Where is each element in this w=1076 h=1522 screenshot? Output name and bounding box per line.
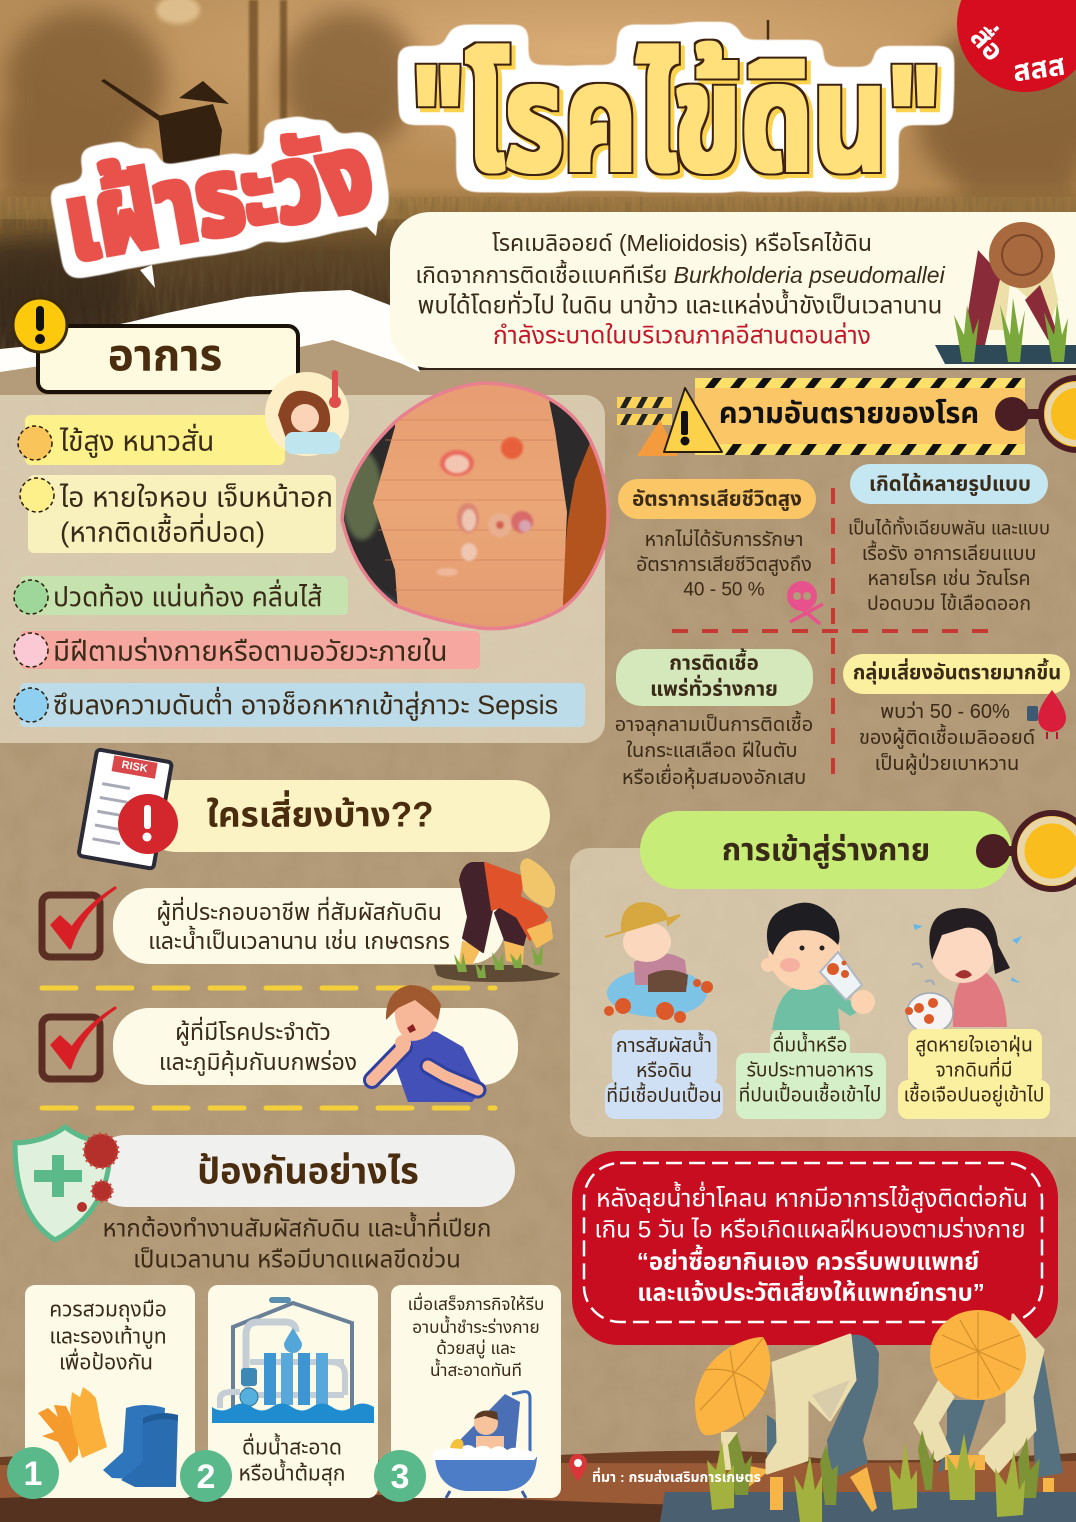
- symptom: cough: ไอ หายใจหอบ เจ็บหน้าอก: [59, 482, 333, 512]
- panel: intro: พบได้โดยทั่วไป ในดิน นาข้าว และแหล่งน้ำขังเป็นเวลานาน: [418, 288, 942, 320]
- icon: risk clipboard: [78, 749, 178, 869]
- block: many forms: เป็นได้ทั้งเฉียบพลัน และแบบ: [848, 516, 1050, 540]
- icon: boy drinking: [761, 903, 875, 1030]
- icon: boots: [103, 1405, 178, 1487]
- icon: blood drop: [1027, 690, 1066, 739]
- text: prevention intro: เป็นเวลานาน หรือมีบาดแผลขีดข่วน: [133, 1246, 461, 1274]
- card: clean water: ดื่มน้ำสะอาด: [242, 1432, 342, 1460]
- label: inhalation: เชื้อเจือปนอยู่เข้าไป: [904, 1082, 1044, 1108]
- badge: step 3: 3: [391, 1458, 409, 1496]
- label: contact: การสัมผัสน้ำ: [616, 1032, 712, 1057]
- sticker tails: [140, 222, 378, 288]
- label: contact: ที่มีเชื้อปนเปื้อน: [606, 1082, 722, 1107]
- text: prevention intro: [103, 1212, 491, 1274]
- icon: man in bathtub: [432, 1392, 537, 1498]
- block: many forms: ปอดบวม ไข้เลือดออก: [867, 592, 1031, 615]
- card: bathing: น้ำสะอาดทันที: [430, 1358, 522, 1380]
- block: many forms: เรื้อรัง อาการเลียนแบบ: [862, 540, 1036, 565]
- heading: ใครเสี่ยงบ้าง: ใครเสี่ยงบ้าง??: [206, 789, 434, 834]
- card: gloves and boots: เพื่อป้องกัน: [59, 1348, 153, 1374]
- heading: ป้องกันอย่างไร: ป้องกันอย่างไร: [197, 1150, 419, 1192]
- card: bathing: เมื่อเสร็จภารกิจให้รีบ: [408, 1292, 544, 1314]
- icon: checkbox 2: [42, 1008, 115, 1079]
- icon: gloves: [38, 1387, 107, 1463]
- illustration: farmers planting rice: [695, 1310, 1063, 1522]
- heading: ป้องกันอย่างไร: [90, 1135, 515, 1207]
- badge: step 2: 2: [197, 1458, 215, 1496]
- icon: warning triangle with barrier and cone: [617, 388, 722, 456]
- label: inhalation: สูดหายใจเอาฝุ่น: [915, 1034, 1033, 1058]
- panel: symptoms: [0, 395, 605, 743]
- card: bathing: ด้วยสบู่ และ: [436, 1338, 516, 1360]
- callout: warning advice: และแจ้งประวัติเสี่ยงให้แพทย์ทราบ”: [637, 1275, 985, 1306]
- callout: warning advice: [572, 1151, 1058, 1345]
- divider: red dashed cross: [672, 488, 1002, 785]
- heading: ใครเสี่ยงบ้าง: [140, 780, 550, 852]
- symptom: abdominal pain: ปวดท้อง แน่นท้อง คลื่นไส้: [53, 579, 322, 612]
- label: inhalation: [898, 1029, 1050, 1119]
- card: clean water: หรือน้ำต้มสุก: [239, 1458, 345, 1486]
- heading: ความอันตรายของโรค: [695, 378, 1025, 455]
- symptom: fever: [18, 415, 285, 465]
- symptom: abscess: [14, 631, 480, 669]
- risk item: chronic disease: และภูมิคุ้มกันบกพร่อง: [159, 1049, 357, 1077]
- card: clean water: [208, 1285, 378, 1498]
- header photo: farmer in misty rice field: [0, 0, 1076, 370]
- panel: intro: โรคเมลิออยด์ (Melioidosis) หรือโรคไข้ดิน: [492, 230, 872, 256]
- icon: warning circle: [13, 298, 67, 352]
- badge: step 1: [7, 1447, 59, 1499]
- source: [569, 1454, 761, 1485]
- symptom: cough: (หากติดเชื้อที่ปอด): [60, 512, 265, 548]
- panel: intro: เกิดจากการติดเชื้อแบคทีเรีย Burkholderia pseudomallei: [415, 259, 946, 288]
- heading: ความอันตรายของโรค: ความอันตรายของโรค: [719, 398, 979, 430]
- card: bathing: [391, 1285, 561, 1498]
- block: high mortality: หากไม่ได้รับการรักษา: [645, 528, 803, 551]
- label: contact: [605, 1030, 723, 1119]
- symptom: cough: [20, 475, 336, 553]
- symptom: fever: ไข้สูง หนาวสั่น: [59, 423, 214, 458]
- card: gloves and boots: ควรสวมถุงมือ: [49, 1298, 167, 1322]
- risk item: farmers: ผู้ที่ประกอบอาชีพ ที่สัมผัสกับดิน: [156, 896, 442, 927]
- symptom: abscess: มีฝีตามร่างกายหรือตามอวัยวะภายใน: [53, 636, 447, 666]
- divider: yellow dashes 1: [42, 986, 495, 990]
- heading: อาการ: [38, 326, 298, 392]
- badge: step 3: [374, 1450, 426, 1502]
- block: systemic infection: หรือเยื่อหุ้มสมองอักเสบ: [622, 763, 806, 789]
- source: ที่มา : กรมส่งเสริมการเกษตร: [592, 1467, 761, 1485]
- block: risk group: เป็นผู้ป่วยเบาหวาน: [875, 752, 1019, 776]
- divider: yellow dashes 2: [42, 1106, 495, 1110]
- block: systemic infection: [615, 648, 813, 789]
- card: bathing: อาบน้ำชำระร่างกาย: [412, 1315, 540, 1337]
- risk item: farmers: [113, 888, 505, 964]
- block: high mortality: [618, 479, 816, 600]
- risk item: chronic disease: [113, 1008, 518, 1085]
- photo: skin lesions: [340, 380, 620, 640]
- callout: warning advice: หลังลุยน้ำย่ำโคลน หากมีอาการไข้สูงติดต่อกัน: [596, 1182, 1028, 1214]
- symptom: abdominal pain: [14, 576, 348, 615]
- label: ingestion: รับประทานอาหาร: [747, 1060, 873, 1082]
- block: risk group: [843, 654, 1070, 776]
- block: systemic infection: แพร่ทั่วร่างกาย: [650, 674, 778, 700]
- block: many forms: เกิดได้หลายรูปแบบ: [869, 472, 1031, 496]
- label: inhalation: จากดินที่มี: [936, 1056, 1012, 1082]
- icon: woman coughing: [905, 908, 1022, 1033]
- heading: การเข้าสู่ร่างกาย: การเข้าสู่ร่างกาย: [722, 832, 930, 868]
- card: gloves and boots: [25, 1285, 195, 1498]
- icon: water filtration system: [212, 1297, 374, 1423]
- block: risk group: ของผู้ติดเชื้อเมลิออยด์: [859, 723, 1035, 750]
- block: high mortality: อัตราการเสียชีวิตสูง: [632, 488, 802, 512]
- label: ingestion: ที่ปนเปื้อนเชื้อเข้าไป: [739, 1082, 881, 1106]
- risk item: chronic disease: ผู้ที่มีโรคประจำตัว: [175, 1016, 331, 1047]
- text: prevention intro: หากต้องทำงานสัมผัสกับดิน และน้ำที่เปียก: [103, 1212, 491, 1242]
- callout: warning advice: เกิน 5 วัน ไอ หรือเกิดแผลฝีหนองตามร่างกาย: [594, 1216, 1026, 1244]
- badge: สื่อ สสส: สื่อ: [964, 18, 1013, 67]
- icon: farmer planting rice (intro): [935, 222, 1076, 364]
- panel: routes of entry: [570, 848, 1076, 1137]
- badge: step 2: [180, 1450, 232, 1502]
- heading: การเข้าสู่ร่างกาย: [640, 811, 1012, 889]
- block: many forms: หลายโรค เช่น วัณโรค: [867, 567, 1031, 590]
- connector: danger header circle: [995, 378, 1076, 450]
- panel: intro: [390, 212, 1076, 368]
- block: risk group: กลุ่มเสี่ยงอันตรายมากขึ้น: [853, 658, 1061, 684]
- symptom: sepsis: [14, 683, 585, 727]
- badge: สื่อ สสส: [957, 0, 1076, 92]
- title: เฝ้าระวัง: เฝ้าระวัง: [55, 111, 381, 283]
- callout: warning advice: “อย่าซื้อยากินเอง ควรรีบพบแพทย์: [637, 1245, 979, 1276]
- icon: sick person with thermometer: [265, 370, 349, 456]
- badge: step 1: 1: [24, 1455, 42, 1493]
- panel: intro: กำลังระบาดในบริเวณภาคอีสานตอนล่าง: [493, 322, 871, 350]
- block: systemic infection: อาจลุกลามเป็นการติดเชื้อ: [615, 710, 813, 736]
- block: high mortality: อัตราการเสียชีวิตสูงถึง: [636, 554, 812, 577]
- icon: risk clipboard: RISK: [121, 759, 149, 775]
- block: high mortality: 40 - 50 %: [683, 580, 765, 600]
- heading: อาการ: อาการ: [108, 332, 222, 380]
- block: many forms: [848, 464, 1050, 615]
- soil strip: [0, 1451, 1076, 1522]
- icon: shield with virus: [15, 1127, 118, 1240]
- icon: checkbox 1: [42, 888, 115, 957]
- label: ingestion: ดื่มน้ำหรือ: [773, 1032, 847, 1056]
- connector: routes header circle: [976, 813, 1076, 889]
- card: gloves and boots: และรองเท้าบูท: [49, 1324, 167, 1350]
- torn paper edge: [0, 290, 1076, 400]
- label: ingestion: [736, 1030, 886, 1119]
- block: systemic infection: ในกระแสเลือด ฝีในตับ: [626, 740, 798, 762]
- symptom: sepsis: ซึมลงความดันต่ำ อาจช็อกหากเข้าสู่ภาวะ Sepsis: [53, 686, 558, 721]
- icon: skull and crossbones: [787, 581, 823, 624]
- block: systemic infection: การติดเชื้อ: [669, 648, 759, 674]
- label: contact: หรือดิน: [636, 1060, 692, 1082]
- icon: farmer bending: [434, 858, 560, 982]
- icon: child in water: [604, 903, 713, 1023]
- risk item: farmers: และน้ำเป็นเวลานาน เช่น เกษตรกร: [148, 925, 450, 954]
- icon: man coughing: [372, 985, 484, 1102]
- block: risk group: พบว่า 50 - 60%: [880, 700, 1010, 723]
- badge: สื่อ สสส: สสส: [1011, 50, 1067, 88]
